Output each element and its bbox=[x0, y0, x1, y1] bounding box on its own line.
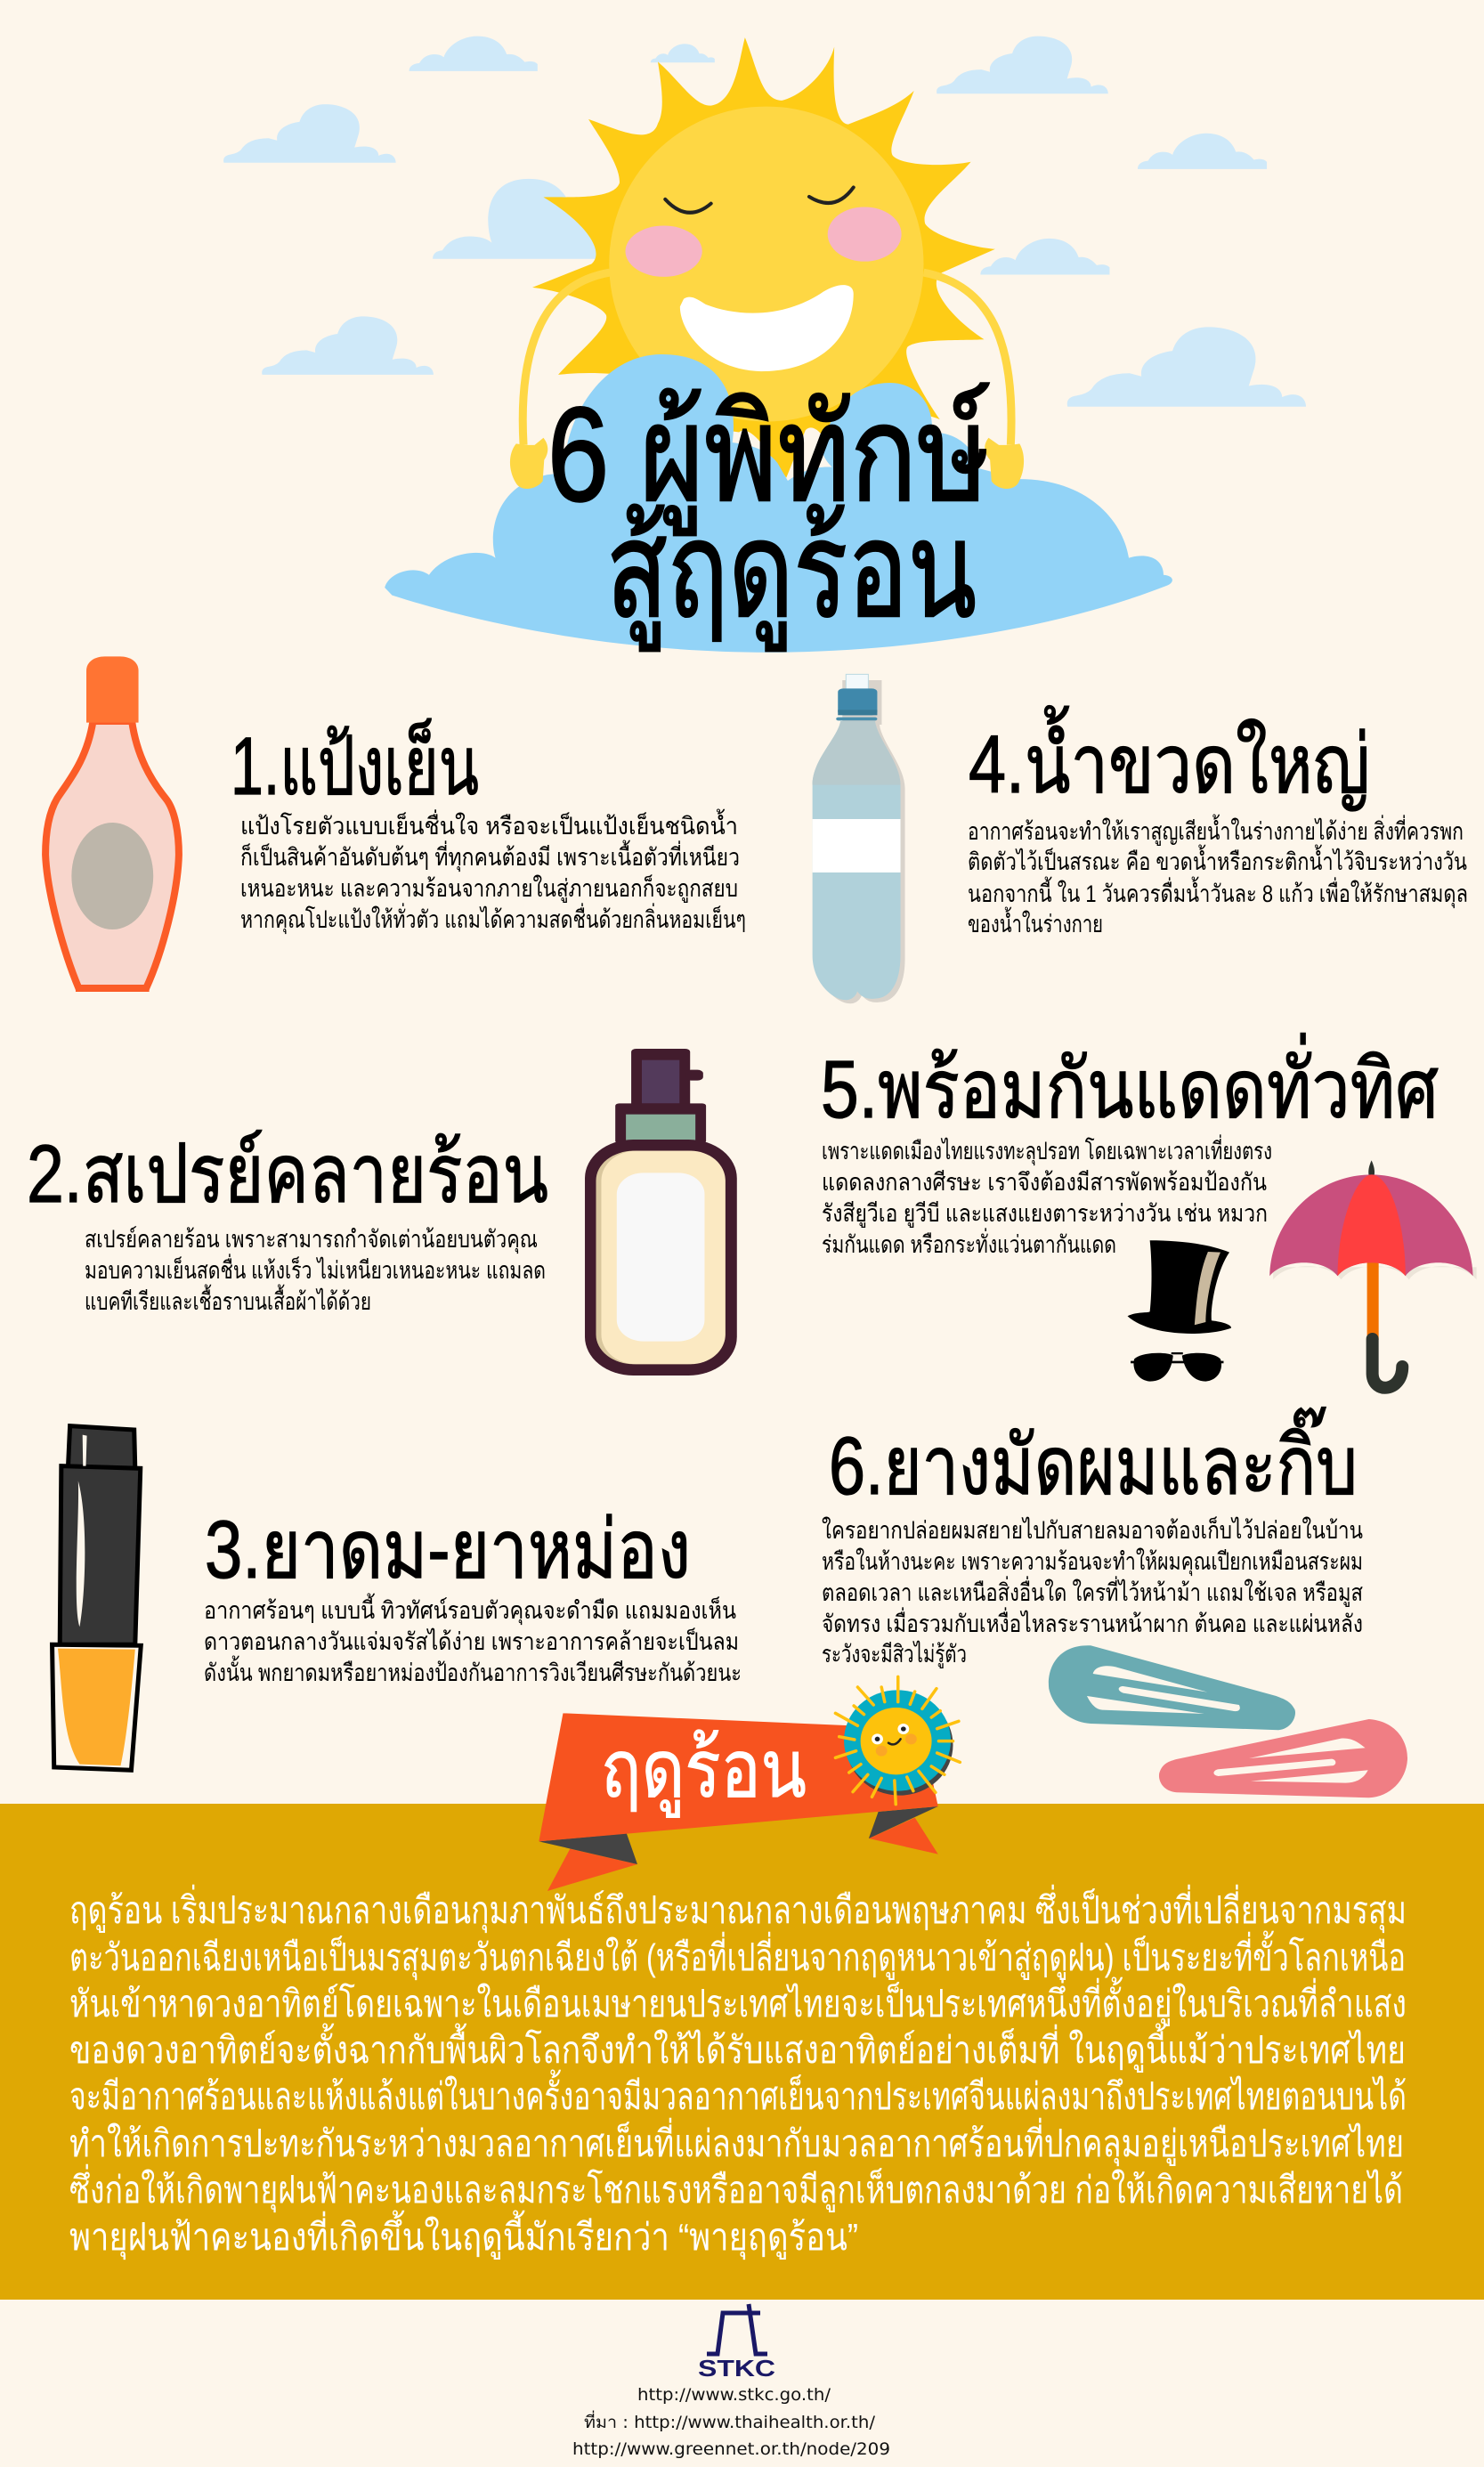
summer paragraph: พายุฝนฟ้าคะนองที่เกิดขึ้นในฤดูนี้มักเรียกว่า “พายุฤดูร้อน” bbox=[69, 2210, 858, 2260]
item 5: heading and text: แดดลงกลางศีรษะ เราจึงต้องมีสารพัดพร้อมป้องกัน bbox=[822, 1169, 1267, 1196]
item 5: heading and text: เพราะแดดเมืองไทยแรงทะลุปรอท โดยเฉพาะเวลาเที่ยงตรง bbox=[822, 1134, 1272, 1166]
item 4: heading and text: 4.น้ำขวดใหญ่ bbox=[969, 705, 1370, 812]
item 1: heading and text: เหนอะหนะ และความร้อนจากภายในสู่ภายนอกก็จะถูกสยบ bbox=[240, 872, 738, 903]
item 3: heading and text bbox=[204, 1505, 742, 1686]
eyes bbox=[665, 187, 854, 213]
item 1: heading and text: ก็เป็นสินค้าอันดับต้นๆ ที่ทุกคนต้องมี เพราะเนื้อตัวที่เหนียว bbox=[240, 840, 740, 872]
item 3: heading and text: ดังนั้น พกยาดมหรือยาหม่องป้องกันอาการวิงเวียนศีรษะกันด้วยนะ bbox=[204, 1655, 742, 1686]
bottle shadow bbox=[817, 680, 905, 1003]
item 2: heading and text: แบคทีเรียและเชื้อราบนเสื้อผ้าได้ด้วย bbox=[85, 1284, 371, 1315]
summer paragraph bbox=[69, 1885, 1407, 2260]
title: 6 ผู้พิทักษ์ bbox=[547, 379, 990, 535]
item 5: heading and text: ร่มกันแดด หรือกระทั่งแว่นตากันแดด bbox=[822, 1228, 1116, 1258]
ribbon body bbox=[539, 1713, 938, 1841]
item 1: heading and text: แป้งโรยตัวแบบเย็นชื่นใจ หรือจะเป็นแป้งเย็นชนิดน้ำ bbox=[240, 808, 738, 840]
item 1: heading and text: หากคุณโปะแป้งให้ทั่วตัว แถมได้ความสดชื่นด้วยกลิ่นหอมเย็นๆ bbox=[240, 903, 746, 935]
item 4: heading and text: ของน้ำในร่างกาย bbox=[968, 906, 1103, 937]
pale clouds bbox=[223, 37, 1306, 407]
sun arms bbox=[523, 272, 1011, 445]
item 2: heading and text: มอบความเย็นสดชื่น แห้งเร็ว ไม่เหนียวเหนอะหนะ แถมลด bbox=[85, 1254, 546, 1284]
item 6: hair clips bbox=[1049, 1645, 1407, 1798]
item 6: heading and text: ระวังจะมีสิวไม่รู้ตัว bbox=[822, 1641, 967, 1668]
item 1: bottle icon bbox=[45, 656, 179, 992]
item 6: heading and text: จัดทรง เมื่อรวมกับเหงื่อไหลระรานหน้าผาก ต้นคอ และแผ่นหลัง bbox=[822, 1607, 1363, 1637]
item 2: heading and text: สเปรย์คลายร้อน เพราะสามารถกำจัดเต่าน้อยบนตัวคุณ bbox=[85, 1225, 538, 1254]
teal clip bbox=[1049, 1645, 1295, 1730]
ribbon banner bbox=[539, 1676, 960, 1891]
sun face bbox=[609, 107, 923, 422]
ribbon label: ฤดูร้อน bbox=[601, 1725, 807, 1818]
sources: ที่มา : http://www.thaihealth.or.th/ bbox=[584, 2410, 876, 2432]
sun rays bbox=[532, 37, 995, 478]
item 2: heading and text: 2.สเปรย์คลายร้อน bbox=[27, 1129, 548, 1220]
sunglasses bbox=[1131, 1352, 1223, 1382]
sources bbox=[572, 2385, 890, 2459]
umbrella bbox=[1269, 1160, 1477, 1388]
item 4: heading and text bbox=[968, 705, 1468, 937]
logo: STKC: STKC bbox=[698, 2355, 775, 2382]
item 3: heading and text: อากาศร้อนๆ แบบนี้ ทิวทัศน์รอบตัวคุณจะดำมืด แถมมองเห็น bbox=[204, 1593, 736, 1626]
item 1: heading and text: 1.แป้งเย็น bbox=[231, 718, 479, 812]
pink clip bbox=[1159, 1719, 1407, 1798]
item 6: heading and text bbox=[822, 1407, 1363, 1668]
illustration: sun on cloud bbox=[223, 37, 1306, 653]
smile bbox=[680, 285, 854, 371]
ribbon tails bbox=[539, 1806, 938, 1891]
sources: http://www.greennet.or.th/node/209 bbox=[572, 2439, 890, 2459]
hands bbox=[510, 438, 1024, 489]
logo: STKC bbox=[698, 2304, 775, 2382]
item 5: heading and text: รังสียูวีเอ ยูวีบี และแสงแยงตาระหว่างวัน เช่น หมวก bbox=[822, 1200, 1268, 1228]
sources: http://www.stkc.go.th/ bbox=[637, 2385, 831, 2405]
item 3: heading and text: ดาวตอนกลางวันแจ่มจรัสได้ง่าย เพราะอาการคล้ายจะเป็นลม bbox=[204, 1626, 739, 1655]
item 4: water bottle icon bbox=[813, 674, 905, 1003]
item 5: heading and text bbox=[821, 1033, 1439, 1258]
item 6: heading and text: ตลอดเวลา และเหนือสิ่งอื่นใด ใครที่ไว้หน้าม้า แถมใช้เจล หรือมูส bbox=[822, 1576, 1363, 1607]
top hat bbox=[1128, 1240, 1231, 1334]
item 1: heading and text bbox=[231, 718, 746, 935]
item 5: umbrella, hat and sunglasses bbox=[1128, 1160, 1477, 1388]
gold panel bbox=[0, 1804, 1484, 2300]
item 6: heading and text: ใครอยากปล่อยผมสยายไปกับสายลมอาจต้องเก็บไว้ปล่อยในบ้าน bbox=[822, 1514, 1363, 1544]
cheeks bbox=[625, 207, 902, 277]
big blue cloud bbox=[385, 354, 1172, 653]
title bbox=[547, 379, 990, 651]
title: สู้ฤดูร้อน bbox=[606, 495, 977, 651]
badge bbox=[835, 1676, 960, 1805]
item 2: heading and text bbox=[27, 1129, 548, 1315]
item 3: balm stick icon bbox=[53, 1426, 141, 1770]
item 3: heading and text: 3.ยาดม-ยาหม่อง bbox=[205, 1505, 691, 1595]
item 6: heading and text: 6.ยางมัดผมและกิ๊บ bbox=[829, 1407, 1358, 1512]
item 2: spray bottle icon bbox=[585, 1049, 737, 1376]
